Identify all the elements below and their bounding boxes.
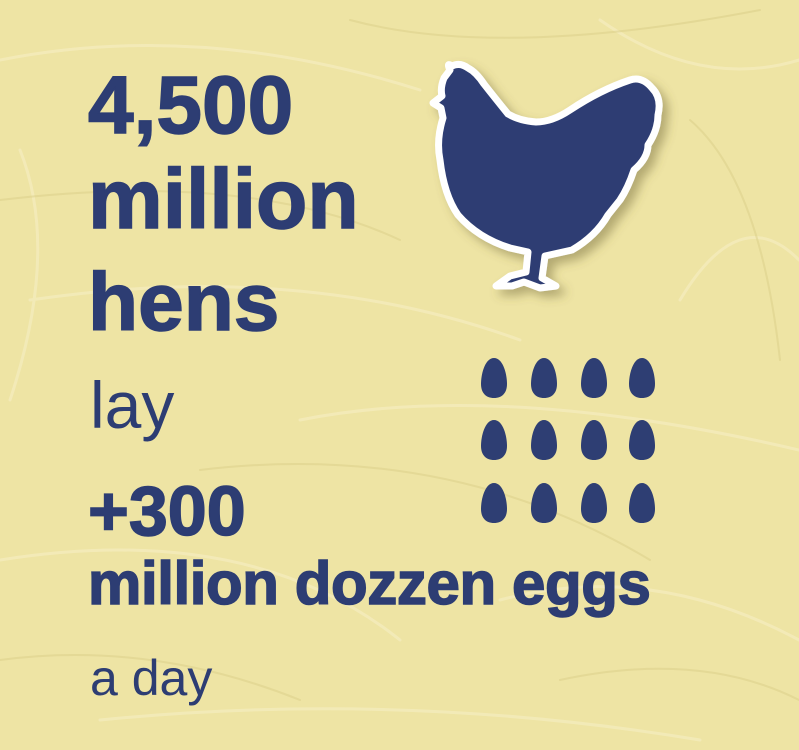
- text: million dozzen eggs: million dozzen eggs: [88, 550, 650, 617]
- stat: +300: +300: [88, 472, 246, 550]
- icon grid: eggs: [481, 358, 655, 523]
- text: a day: a day: [90, 650, 212, 706]
- heading: 4,500: 4,500: [88, 60, 293, 151]
- heading: hens: hens: [88, 257, 279, 348]
- text: lay: lay: [90, 368, 174, 442]
- heading: million: million: [88, 152, 359, 246]
